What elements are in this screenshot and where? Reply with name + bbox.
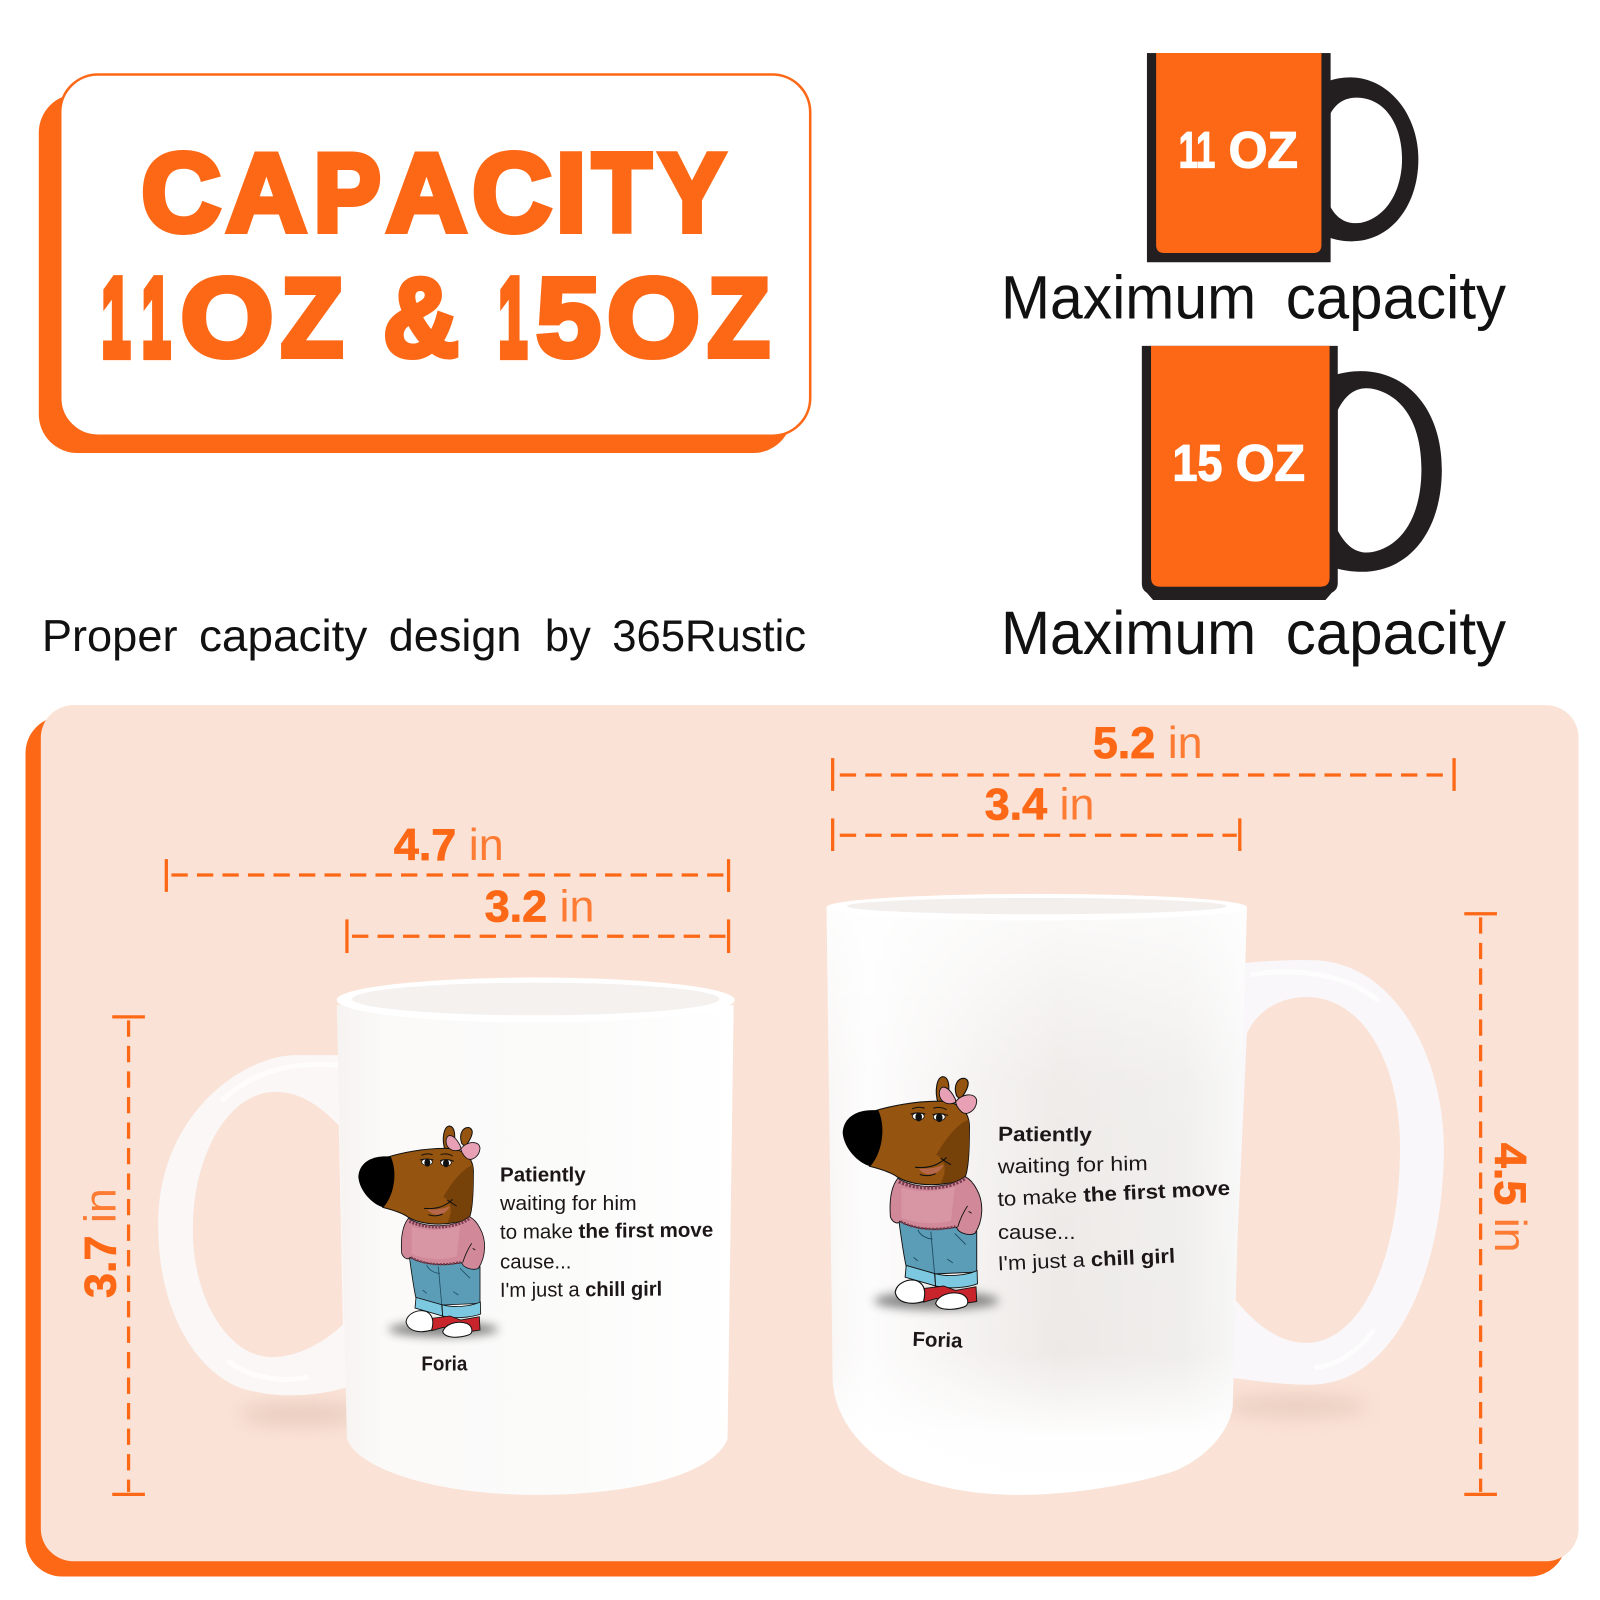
title card [39,74,810,453]
dimension: 5.2 in [833,717,1454,791]
heading: capacity: Y [659,130,725,255]
heading: 11oz and 15oz: O [607,255,700,380]
heading: capacity: C [472,130,552,255]
panel: mug dimensions [26,705,1579,1577]
tagline: 365Rustic [612,610,806,661]
tagline [42,610,806,661]
tagline: Proper [42,610,178,661]
dimension: 3.4 in [833,778,1240,851]
heading: capacity: P [313,130,381,255]
heading: capacity: T [592,130,651,255]
heading: 11oz and 15oz [102,255,770,380]
heading: capacity: C [141,130,221,255]
dimension: 4.7 in [166,819,729,892]
label: 15 oz [1172,435,1305,492]
caption: maximum capacity 11 oz [1001,263,1506,331]
character: bear on 15 oz mug [843,1077,999,1310]
mug: 15 oz photo [827,894,1444,1495]
heading: 11oz and 15oz: 1 [102,255,130,380]
label: 15 oz: OZ [1236,435,1305,492]
mug print text: 11 oz: waiting for him [499,1193,637,1215]
heading: capacity: A [226,130,307,255]
heading: 11oz and 15oz: O [181,255,273,380]
mug print text: 15 oz: Foria [912,1329,963,1353]
tagline: by [545,610,591,661]
mug print text: 11 oz: cause... [500,1251,571,1273]
mug print text: 15 oz [912,1124,1231,1353]
label: 15 oz: 15 [1172,435,1222,492]
caption: maximum capacity 15 oz [1001,599,1506,667]
dimension: 3.2 in: 3.2 in [485,880,594,931]
mug print text: 15 oz: cause... [998,1222,1076,1244]
mug print text: 11 oz: to make the first move [500,1220,713,1244]
dimension: 4.5 in [1464,914,1536,1494]
mug print text: 11 oz: I'm just a chill girl [500,1279,662,1302]
heading: capacity: I [556,130,586,255]
heading: 11oz and 15oz: 5 [536,255,601,380]
label: 11 oz [1179,121,1298,178]
dimension: 3.7 in: 3.7 in [74,1188,125,1298]
caption: maximum capacity 15 oz: capacity [1286,599,1506,667]
heading: 11oz and 15oz: & [383,255,459,380]
dimension: 4.7 in: 4.7 in [394,819,504,870]
icon: 11 oz mug [1147,53,1418,262]
icon: 15 oz mug [1142,346,1442,600]
dimension: 3.4 in: 3.4 in [985,778,1094,829]
mug print text: 15 oz: Patiently [998,1124,1093,1147]
heading: 11oz and 15oz: 1 [499,255,527,380]
label: 11 oz: OZ [1229,121,1298,178]
dimension: 3.2 in [347,880,729,953]
heading: 11oz and 15oz: Z [281,255,343,380]
caption: maximum capacity 15 oz: Maximum [1001,599,1256,667]
caption: maximum capacity 11 oz: Maximum [1001,263,1256,331]
tagline: capacity [199,610,368,661]
dimension: 5.2 in: 5.2 in [1093,717,1203,768]
caption: maximum capacity 11 oz: capacity [1286,263,1506,331]
dimension: 4.5 in: 4.5 in [1485,1143,1536,1253]
character: bear on 11 oz mug [358,1126,498,1337]
mug print text: 15 oz: I'm just a chill girl [997,1246,1176,1275]
heading: capacity [141,130,725,255]
mug: 11 oz photo [158,978,735,1495]
heading: capacity: A [386,130,467,255]
dimension: 3.7 in [74,1017,145,1494]
heading: 11oz and 15oz: Z [708,255,770,380]
mug print text: 11 oz: Foria [421,1353,468,1375]
mug print text: 11 oz: Patiently [500,1165,586,1187]
mug print text: 15 oz: to make the first move [997,1178,1231,1211]
mug print text: 11 oz [421,1165,713,1375]
heading: 11oz and 15oz: 1 [142,255,171,380]
mug print text: 15 oz: waiting for him [996,1153,1148,1178]
tagline: design [389,610,521,661]
label: 11 oz: 11 [1179,121,1215,178]
